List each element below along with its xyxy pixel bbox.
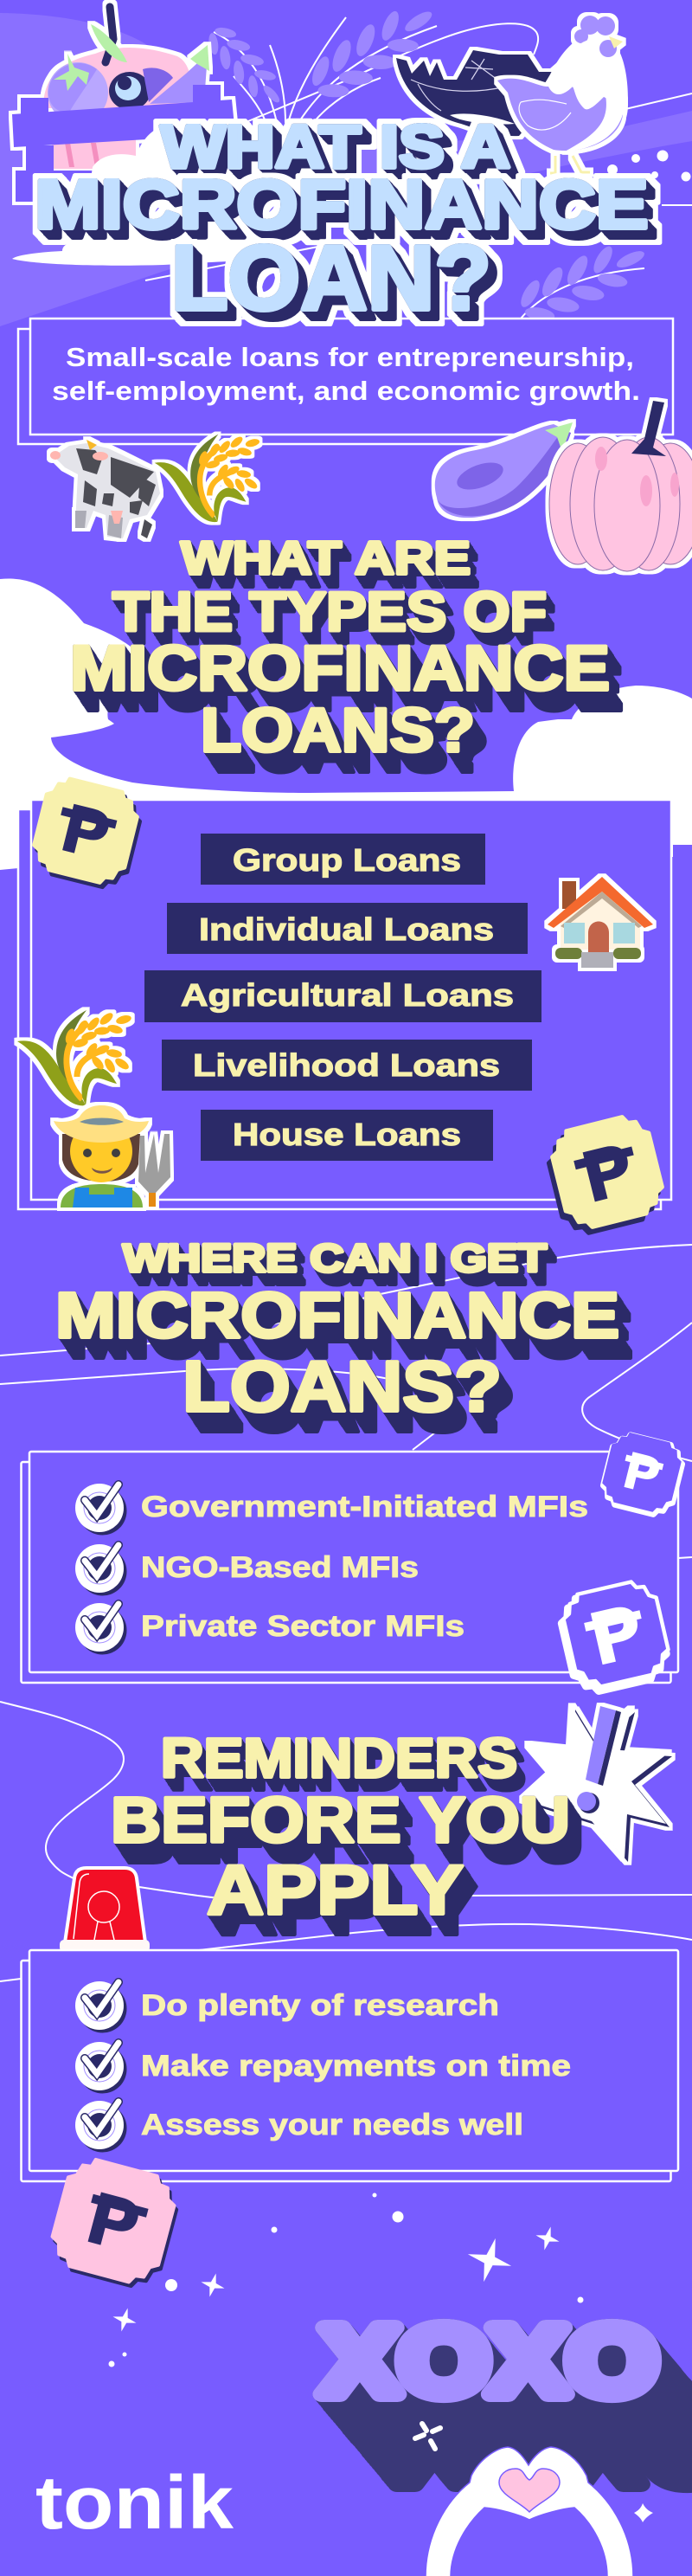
- icon: eggplant: [435, 422, 573, 518]
- heading: reminders: BEFORE YOU: [111, 1784, 570, 1856]
- icon: boat: [396, 50, 571, 136]
- icon: heart hands: [426, 2447, 633, 2576]
- panel: where to get loans: [21, 1452, 678, 1683]
- pill: livelihood loans: [162, 1040, 532, 1091]
- check item: NGO: [75, 1544, 419, 1596]
- heading: where to get loans: LOANS?: [183, 1346, 502, 1426]
- check item: government: Government-Initiated MFIs: [141, 1491, 588, 1523]
- heading: types of loans: WHAT ARE: [181, 532, 471, 584]
- icon: red siren: [60, 1868, 150, 1952]
- icon: pink peso coin: [45, 2154, 183, 2292]
- pill: livelihood loans: Livelihood Loans: [193, 1047, 500, 1083]
- wheat sprigs: [197, 0, 656, 336]
- white cloud behind title: [12, 126, 260, 266]
- icon: cow: [50, 440, 160, 538]
- title: LOAN?: [171, 227, 491, 329]
- check item: private sector: Private Sector MFIs: [141, 1610, 465, 1643]
- pill: group loans: [201, 834, 485, 885]
- panel: loan types: [18, 800, 671, 1209]
- intro text: Small-scale loans for entrepreneurship,: [66, 342, 634, 372]
- check item: NGO: NGO-Based MFIs: [141, 1551, 419, 1584]
- check item: assess needs: Assess your needs well: [141, 2109, 523, 2141]
- intro text: [52, 342, 640, 406]
- icon: peso coin one: [28, 775, 146, 892]
- title: [35, 113, 649, 329]
- check item: repayments: Make repayments on time: [141, 2050, 571, 2083]
- decorative dots: [607, 151, 690, 182]
- top background lines: [145, 23, 692, 280]
- icon: exclamation burst: [522, 1706, 672, 1862]
- icon: peso coin one: P: [53, 790, 118, 875]
- icon: pink peso coin: P: [77, 2178, 148, 2270]
- icon: pumpkin: [549, 401, 692, 571]
- icon: vegetable crate: [12, 7, 235, 202]
- panel: intro box: [18, 319, 673, 444]
- check item: research: Do plenty of research: [141, 1989, 499, 2022]
- pill: agricultural loans: Agricultural Loans: [181, 977, 514, 1013]
- white clouds behind section two: [0, 578, 692, 870]
- check item: research: [75, 1981, 499, 2032]
- icon: farmer: [54, 1105, 170, 1208]
- heading: where to get loans: WHERE CAN I GET: [123, 1236, 547, 1280]
- pill: house loans: House Loans: [233, 1117, 461, 1152]
- panel: reminders: [21, 1950, 678, 2181]
- heading: types of loans: THE TYPES OF: [112, 580, 547, 642]
- check item: assess needs: [75, 2101, 523, 2152]
- heading: types of loans: [70, 532, 610, 765]
- stars and dots: [109, 2193, 583, 2367]
- heading: reminders: [111, 1727, 570, 1929]
- icon: outlined peso coin small: P: [617, 1441, 666, 1506]
- logo: tonik: tonik: [35, 2461, 234, 2545]
- heading: reminders: APPLY: [207, 1852, 464, 1929]
- icon: peso coin two: P: [573, 1128, 642, 1220]
- intro text: self-employment, and economic growth.: [52, 376, 640, 406]
- icon: small diamond: [634, 2503, 653, 2522]
- icon: house: [548, 877, 653, 968]
- pill: agricultural loans: [144, 970, 541, 1022]
- icon: outlined peso coin large: P: [581, 1588, 651, 1683]
- check item: repayments: [75, 2042, 571, 2093]
- pill: group loans: Group Loans: [233, 842, 461, 878]
- icon: chicken: [497, 16, 625, 173]
- heading: types of loans: MICROFINANCE: [70, 634, 610, 704]
- light background band: [0, 13, 692, 326]
- pill: individual loans: [167, 903, 528, 954]
- XOXO lettering: XOXO: [321, 2307, 657, 2415]
- icon: sparkle cross: [415, 2424, 440, 2449]
- check item: government: [75, 1484, 588, 1536]
- heading: reminders: REMINDERS: [161, 1727, 517, 1789]
- icon: peso coin two: [542, 1111, 669, 1239]
- check item: private sector: [75, 1603, 465, 1655]
- pill: house loans: [201, 1110, 493, 1161]
- title: WHAT IS A: [161, 113, 510, 180]
- icon: outlined peso coin large: [556, 1577, 674, 1696]
- heading: where to get loans: MICROFINANCE: [55, 1279, 619, 1351]
- title: MICROFINANCE: [35, 166, 649, 242]
- heading: where to get loans: [55, 1236, 619, 1426]
- icon: rice: [155, 435, 260, 522]
- icon: rice two: [17, 1010, 132, 1105]
- heading: types of loans: LOANS?: [201, 697, 475, 765]
- icon: outlined peso coin small: [599, 1429, 686, 1517]
- pill: individual loans: Individual Loans: [199, 911, 494, 947]
- middle background lines: [0, 1245, 692, 1981]
